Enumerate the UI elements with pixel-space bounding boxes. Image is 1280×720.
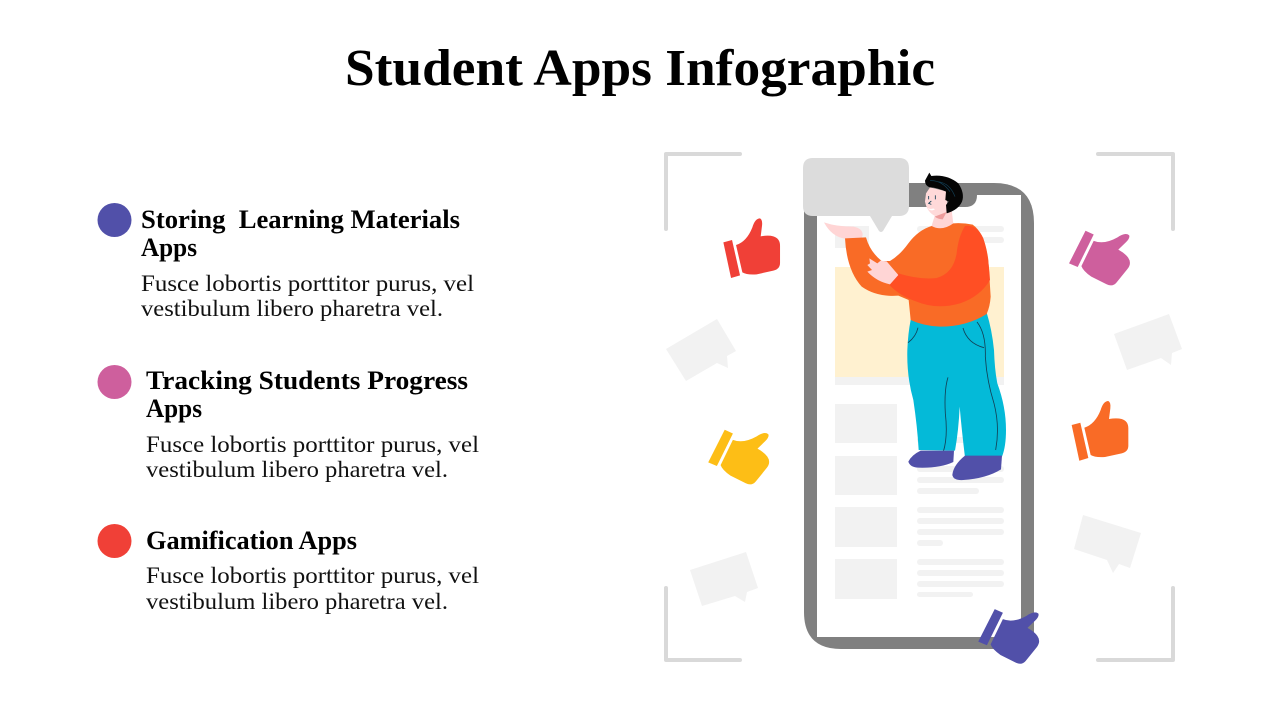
person [824,173,1006,480]
neck [931,210,953,229]
icon: red thumbs up [723,218,780,278]
pants [907,313,1006,457]
heading: storing learning materials [141,205,460,262]
sweater sleeve [889,226,990,306]
body text: Fusce lobortis porttitor purus, vel [146,563,479,589]
phone screen [817,195,1021,637]
phone [804,183,1034,649]
speech bubble [803,158,909,232]
item: storing learning materials [98,203,474,322]
neck shadow [935,212,947,219]
smile [928,209,935,210]
sweater [845,223,991,327]
body text: vestibulum libero pharetra vel. [146,457,448,483]
body text [141,271,474,322]
icon: yellow thumbs up [702,411,784,493]
body text: vestibulum libero pharetra vel. [141,296,443,322]
item: gamification apps [98,524,479,615]
heading: storing learning materials: Apps [141,233,197,262]
screen content [835,226,1004,599]
bullet: indigo [98,203,132,237]
face [925,187,947,217]
icon: pink thumbs up [1063,212,1145,294]
body text [146,563,479,615]
title: Student Apps Infographic [345,40,935,97]
heading: gamification apps: Gamification Apps [146,526,357,555]
item: tracking students progress [98,365,479,483]
palm [824,222,863,239]
icon: orange thumbs up [1072,401,1128,461]
hair [925,173,963,213]
pants seams [908,322,997,452]
icon: indigo thumbs up [972,590,1054,672]
body text: vestibulum libero pharetra vel. [146,589,448,615]
illustration: background speech bubbles [666,314,1182,606]
body text: Fusce lobortis porttitor purus, vel [141,271,474,297]
heading: tracking students progress: Tracking Students Progress [146,366,468,395]
shoes [908,451,1002,480]
phone frame [804,183,1034,649]
hair highlights [930,181,955,197]
heading: tracking students progress: Apps [146,394,202,423]
phone notch [900,183,977,207]
eyes and nose [929,195,935,204]
hero image placeholder [835,267,1004,377]
heading: storing learning materials: Storing Learning Materials [141,205,460,234]
illustration: corner brackets [666,154,1173,660]
bullet: red [98,524,132,558]
body text: Fusce lobortis porttitor purus, vel [146,432,479,458]
panel: app list [98,203,479,615]
hand [867,258,898,284]
body text [146,432,479,483]
heading: tracking students progress [146,366,468,423]
bullet: pink [98,365,132,399]
